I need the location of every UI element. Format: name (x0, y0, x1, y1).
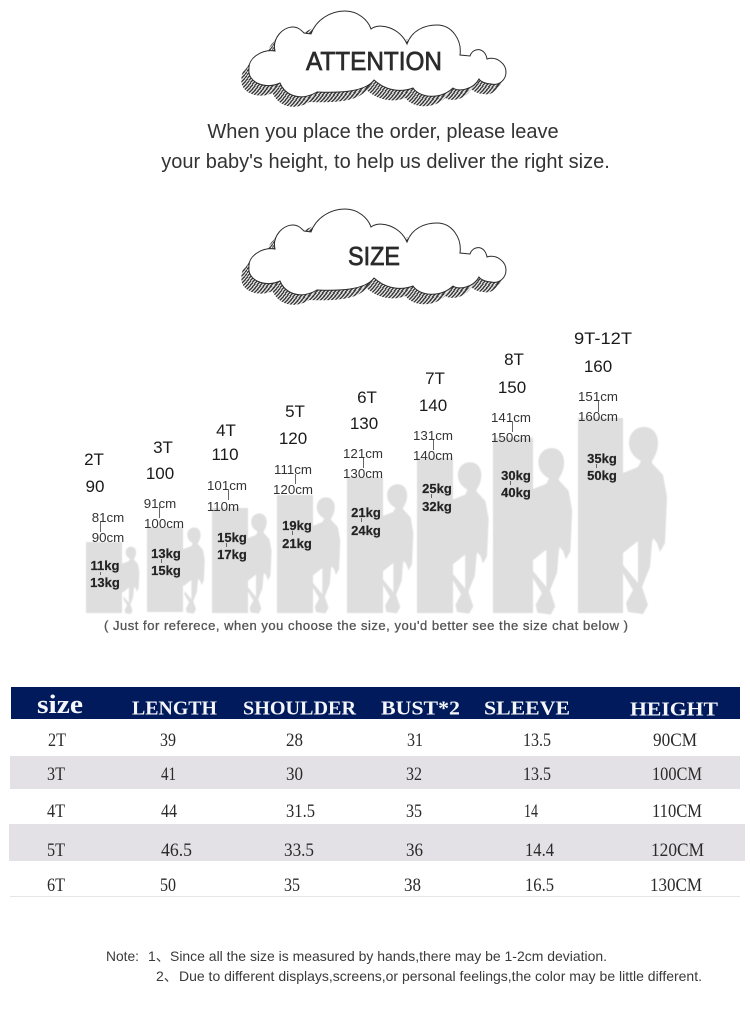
cloud: size heading (241, 209, 506, 305)
row: 4T (47, 801, 702, 822)
text block: notes: 2、 (156, 968, 178, 984)
row: 3T: 100CM (652, 764, 702, 785)
size label: 9T-12T: 160 (584, 357, 612, 376)
size label: 2T: 13kg (90, 575, 120, 590)
size label: 3T: 13kg (151, 546, 181, 561)
row: 2T: 31 (407, 730, 423, 751)
row: 3T: 41 (161, 764, 176, 785)
text block: order instruction: When you place the order, please leave (207, 121, 559, 143)
chart: height silhouettes (86, 418, 667, 615)
size label: 8T: 150cm (491, 430, 531, 445)
table header: SHOULDER (243, 698, 357, 720)
table header (11, 687, 740, 720)
size label: 6T: 130 (350, 414, 378, 433)
caption: reference note: ( Just for referece, when you choose the size, you'd better see the size chat below ) (104, 618, 628, 633)
text block: notes: 1、 (148, 948, 170, 964)
size label: 8T: 30kg (501, 468, 531, 483)
row band: 5T (9, 824, 745, 861)
size label: 2T (84, 450, 124, 590)
row: 2T: 39 (160, 730, 176, 751)
table: size chart (9, 687, 745, 897)
size label: 5T: 5T (285, 402, 305, 421)
size label: 5T: 120cm (273, 482, 313, 497)
size label: 8T: 141cm (491, 410, 531, 425)
row: 2T: 13.5 (523, 730, 551, 751)
size label: 4T: 110m (207, 499, 239, 514)
row: 5T (47, 840, 704, 861)
row: 5T: 33.5 (284, 840, 314, 861)
row: 3T: 32 (406, 764, 422, 785)
size label: 8T: 40kg (501, 485, 531, 500)
size label: 6T (343, 388, 383, 538)
text block: notes: Since all the size is measured by hands,there may be 1-2cm deviation. (170, 948, 607, 964)
row: 4T: 14 (524, 801, 538, 822)
size label: 6T: 21kg (351, 505, 381, 520)
size label: 3T (144, 438, 184, 578)
row: 3T (47, 764, 702, 785)
size label: 3T: 100cm (144, 516, 184, 531)
size label: 5T: 19kg (282, 518, 312, 533)
size label: 6T: 24kg (351, 523, 381, 538)
size label: 3T: 15kg (151, 563, 181, 578)
size label: 7T: 140 (419, 396, 447, 415)
size label: 6T: 6T (357, 388, 377, 407)
row: 6T: 38 (404, 875, 421, 896)
size label: 2T: 11kg (91, 558, 120, 573)
size label: 8T: 8T (504, 350, 524, 369)
row: 4T: 31.5 (286, 801, 315, 822)
row: 3T: 3T (47, 764, 65, 785)
size label: 8T: 150 (498, 378, 526, 397)
text block: order instruction: your baby's height, to help us deliver the right size. (161, 151, 610, 173)
size label: 9T-12T: 50kg (587, 468, 617, 483)
size label: 3T: 91cm (144, 496, 176, 511)
row: 5T: 36 (406, 840, 423, 861)
row: 3T: 13.5 (523, 764, 551, 785)
size label: 2T: 2T (84, 450, 104, 469)
row: 4T: 44 (161, 801, 177, 822)
size label: 9T-12T (574, 329, 632, 483)
size label: 4T: 15kg (217, 530, 247, 545)
row: 3T: 30 (286, 764, 303, 785)
size label: 9T-12T: 9T-12T (574, 329, 632, 348)
size label: 3T: 100 (146, 464, 174, 483)
size label: 9T-12T: 151cm (578, 389, 618, 404)
size label: 8T (491, 350, 531, 500)
size label: 6T: 121cm (343, 446, 383, 461)
row: 4T: 110CM (652, 801, 702, 822)
size label: 3T: 3T (153, 438, 173, 457)
table header: size (37, 690, 83, 719)
table header: SLEEVE (484, 698, 570, 720)
row band: 3T (10, 756, 740, 789)
row: 2T: 2T (48, 730, 66, 751)
size label: 4T: 4T (216, 421, 236, 440)
size label: 7T: 131cm (413, 428, 453, 443)
text block: notes (106, 948, 702, 984)
row: 6T: 50 (160, 875, 176, 896)
text block: notes: Note: (106, 948, 139, 964)
row: 2T: 90CM (653, 730, 697, 751)
size label: 9T-12T: 160cm (578, 409, 618, 424)
size label: 7T: 7T (425, 369, 445, 388)
text block: order instruction (161, 121, 610, 173)
row: 6T: 35 (284, 875, 300, 896)
size label: 7T (413, 369, 453, 514)
size label: 4T: 101cm (207, 478, 247, 493)
size label: 4T: 17kg (217, 547, 247, 562)
size label: 2T: 90 (86, 477, 104, 496)
row: 2T: 28 (286, 730, 303, 751)
row: 6T (47, 875, 702, 896)
row: 6T: 130CM (650, 875, 702, 896)
size label: 4T: 110 (211, 445, 239, 464)
row: 4T: 4T (47, 801, 65, 822)
size label: 2T: 90cm (92, 530, 124, 545)
size label: 7T: 25kg (422, 481, 452, 496)
size label: 6T: 130cm (343, 466, 383, 481)
size label: 9T-12T: 35kg (587, 451, 617, 466)
row: 5T: 14.4 (525, 840, 554, 861)
row: 5T: 5T (47, 840, 65, 861)
size label: 4T (207, 421, 247, 562)
row: 4T: 35 (406, 801, 422, 822)
row: 6T: 16.5 (525, 875, 554, 896)
row: 5T: 120CM (651, 840, 704, 861)
size label: 2T: 81cm (92, 510, 124, 525)
size label: 5T (273, 402, 313, 551)
heading: attention: ATTENTION (306, 48, 442, 76)
row: 2T (48, 730, 697, 751)
heading: size: SIZE (348, 243, 400, 271)
row: 6T: 6T (47, 875, 65, 896)
size label: 5T: 111cm (274, 462, 312, 477)
row: 5T: 46.5 (161, 840, 192, 861)
text block: notes: Due to different displays,screens,or personal feelings,the color may be little different. (179, 968, 702, 984)
cloud: attention heading (241, 11, 506, 107)
table header: HEIGHT (630, 698, 719, 720)
table header: BUST*2 (381, 698, 460, 720)
size label: 7T: 32kg (422, 499, 452, 514)
size label: 5T: 21kg (282, 536, 312, 551)
size label: 5T: 120 (279, 429, 307, 448)
table header: LENGTH (132, 698, 217, 720)
size label: 7T: 140cm (413, 448, 453, 463)
